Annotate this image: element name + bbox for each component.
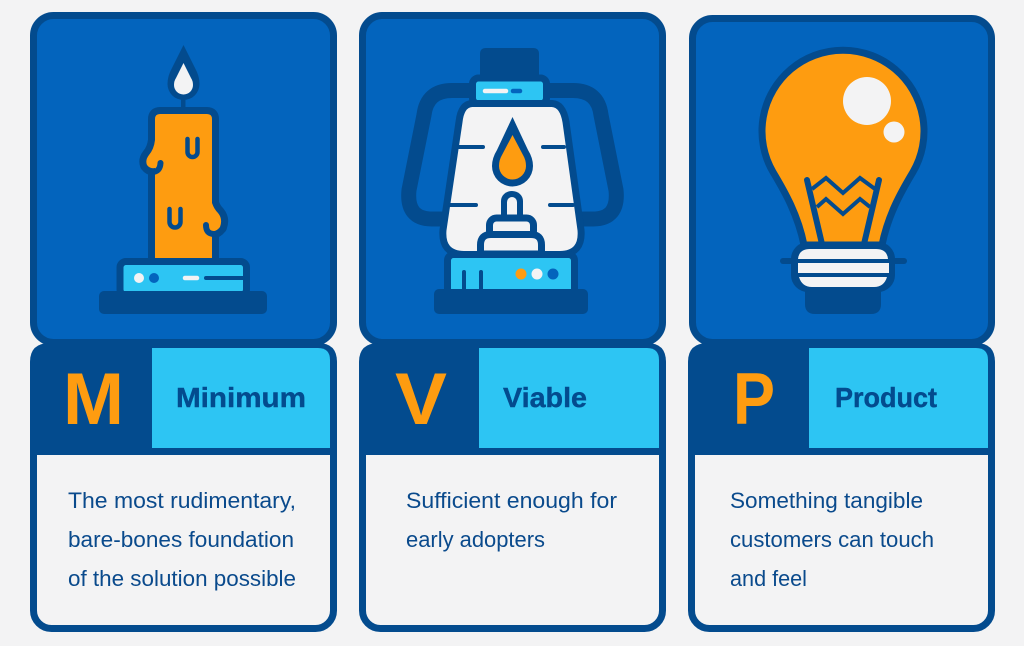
heading: Product: Product [835,382,937,413]
panel: minimum column [30,16,337,628]
label card: product [688,343,995,628]
description: viable: early adopters [406,527,545,552]
heading: Viable: Viable [503,382,587,413]
description: minimum [68,488,296,591]
label card: minimum [30,343,337,628]
candle illustration panel [34,16,334,342]
lantern illustration panel [362,16,662,342]
panel: viable column [359,16,666,628]
description: minimum: The most rudimentary, [68,488,296,513]
description: product: customers can touch [730,527,934,552]
panel: product column [688,18,995,628]
icon: light bulb [762,50,924,314]
description: product: Something tangible [730,488,923,513]
label card: viable [359,343,666,628]
description: product [730,488,934,591]
description: product: and feel [730,566,807,591]
description: viable [406,488,617,552]
letter P: P [733,359,775,440]
heading: Minimum: Minimum [176,382,306,413]
icon: candle [99,45,267,314]
letter V: V [395,359,447,440]
icon: lantern [409,48,616,314]
light bulb illustration panel [692,18,992,342]
description: minimum: of the solution possible [68,566,296,591]
description: minimum: bare-bones foundation [68,527,294,552]
description: viable: Sufficient enough for [406,488,617,513]
letter M: M [63,359,124,440]
